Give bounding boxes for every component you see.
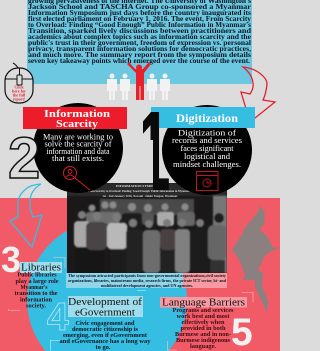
text: click for report: Click <box>14 84 24 90</box>
text: digitization body: faces significant <box>180 144 234 153</box>
section: language barriers <box>160 292 253 351</box>
text: libraries body: transition to the <box>14 290 58 297</box>
section: libraries: Libraries <box>21 262 61 274</box>
arrow: red outline <box>241 67 275 122</box>
text: photo banner: 1st - 2nd January 2016, Novotel - Inlein Yangon, Myanmar <box>102 194 178 198</box>
banner: information scarcity <box>23 107 127 130</box>
text: information scarcity body: Many are working to <box>43 132 113 142</box>
section: development of egovernment <box>47 290 151 351</box>
text: libraries body: Myanmar's <box>20 284 48 291</box>
numeral: 4: 4 <box>47 296 69 339</box>
panel: intro text <box>27 0 252 84</box>
panel: intro text: to Overload: Finding “Good Enough” Public Information in Myanmar's <box>28 22 251 29</box>
map: Myanmar <box>232 206 280 313</box>
figures: group portrait <box>67 183 227 273</box>
icon: magnifier with person <box>64 166 90 190</box>
text: click for report: the full <box>13 92 26 98</box>
section: libraries <box>1 239 65 310</box>
icon: computer mouse <box>5 63 33 103</box>
text: digitization body: mindset challenges. <box>173 160 241 169</box>
text: click for report: report! <box>13 96 26 102</box>
panel: intro text: Jackson School and TASCHA Group co-sponsored a Myanmar <box>28 4 251 11</box>
panel: coral lower section <box>0 198 280 351</box>
icon: window with clock <box>196 172 218 190</box>
panel: intro text: academics about complex topics such as information scarcity and the <box>28 34 251 41</box>
text: libraries body: Public libraries <box>18 272 57 278</box>
text: digitization body: Digitization of <box>178 128 236 138</box>
icon: group of people <box>107 62 170 100</box>
text: digitization body: records and services <box>172 136 242 145</box>
section: development of egovernment: Development of <box>68 296 142 308</box>
panel: intro text: Information Symposium just days before the country inaugurated its <box>28 10 251 17</box>
text: language barriers body <box>172 307 234 350</box>
text: photo banner <box>88 184 193 198</box>
text: information scarcity body <box>43 132 113 163</box>
panel: intro text: public's trust in their government, freedom of expression vs. personal <box>28 40 251 47</box>
text: language barriers body: work best and most <box>176 313 230 320</box>
banner: digitization: Digitization <box>176 113 239 125</box>
numeral: 3: 3 <box>1 239 21 280</box>
text: libraries body: play a large role <box>16 278 59 285</box>
panel: intro text: and much more. The summary report from the symposium details <box>28 52 251 59</box>
text: language barriers body: Programs and services <box>172 307 234 314</box>
text: information scarcity body: that still exists. <box>52 154 104 163</box>
text: egovernment body: democratic citizenship is <box>72 326 139 333</box>
banner: digitization <box>151 107 255 128</box>
section: development of egovernment: eGovernment <box>75 306 135 318</box>
panel: intro text: Transition, sparked lively discussions between practitioners and <box>28 28 251 35</box>
text: language barriers body: effectively when <box>182 319 225 326</box>
text: digitization body <box>172 128 242 169</box>
text: language barriers body: provided in both <box>180 325 226 332</box>
text: libraries body: information <box>20 296 53 304</box>
banner: information scarcity: Information <box>44 108 110 120</box>
arrow: blue outline <box>10 184 42 247</box>
panel: information scarcity circle <box>33 103 123 193</box>
photo: symposium group <box>67 183 227 273</box>
text: egovernment body <box>60 320 151 351</box>
panel: photo caption: multilateral development agencies, and UN agencies. <box>101 283 193 288</box>
text: libraries body: society. <box>26 302 46 310</box>
text: egovernment body: emerging, even if eGovernment <box>63 332 148 339</box>
text: egovernment body: and eGovernance has a long way <box>60 338 151 345</box>
text: photo banner: INFORMATION SYMPOSIUM <box>116 184 165 188</box>
numeral: 1: 1 <box>136 88 171 215</box>
text: language barriers body: language. <box>190 343 216 350</box>
text: egovernment body: to go. <box>96 344 111 351</box>
panel: intro text: seven key takeaway points which emerged over the course of the event. <box>28 58 250 65</box>
panel: photo caption <box>66 273 227 288</box>
text: photo banner: From Scarcity to Overload: Finding 'Good Enough' Public Information in Myanmar's <box>88 189 193 193</box>
text: click for report <box>12 84 26 102</box>
panel: photo caption: The symposium attracted participants from non-governmental organizations,civil society <box>68 273 227 278</box>
panel: digitization circle <box>162 105 252 195</box>
panel: intro text: privacy, transparent information solutions for democratic practices, <box>28 46 251 53</box>
panel: intro text: first elected parliament on February 1, 2016. The event, From Scarcity <box>28 16 252 23</box>
text: digitization body: logistical and <box>184 152 230 161</box>
panel: photo caption: organizations, libraries, mainstream media, research firms, the private ICT sector, bi- and <box>68 278 227 283</box>
text: information scarcity body: information and data <box>46 147 110 156</box>
numeral: 2: 2 <box>8 126 40 191</box>
text: libraries body <box>14 272 59 310</box>
section: language barriers: Language Barriers <box>162 298 245 308</box>
text: egovernment body: Civic engagement and <box>76 320 135 327</box>
text: language barriers body: Burmese and in non- <box>175 331 231 338</box>
banner: information scarcity: Scarcity <box>56 118 99 130</box>
panel: blue circle <box>27 220 187 351</box>
text: language barriers body: Burmese indigenous <box>176 337 231 344</box>
text: click for report: here for <box>12 88 26 94</box>
text: information scarcity body: solve the scarcity of <box>44 140 112 149</box>
